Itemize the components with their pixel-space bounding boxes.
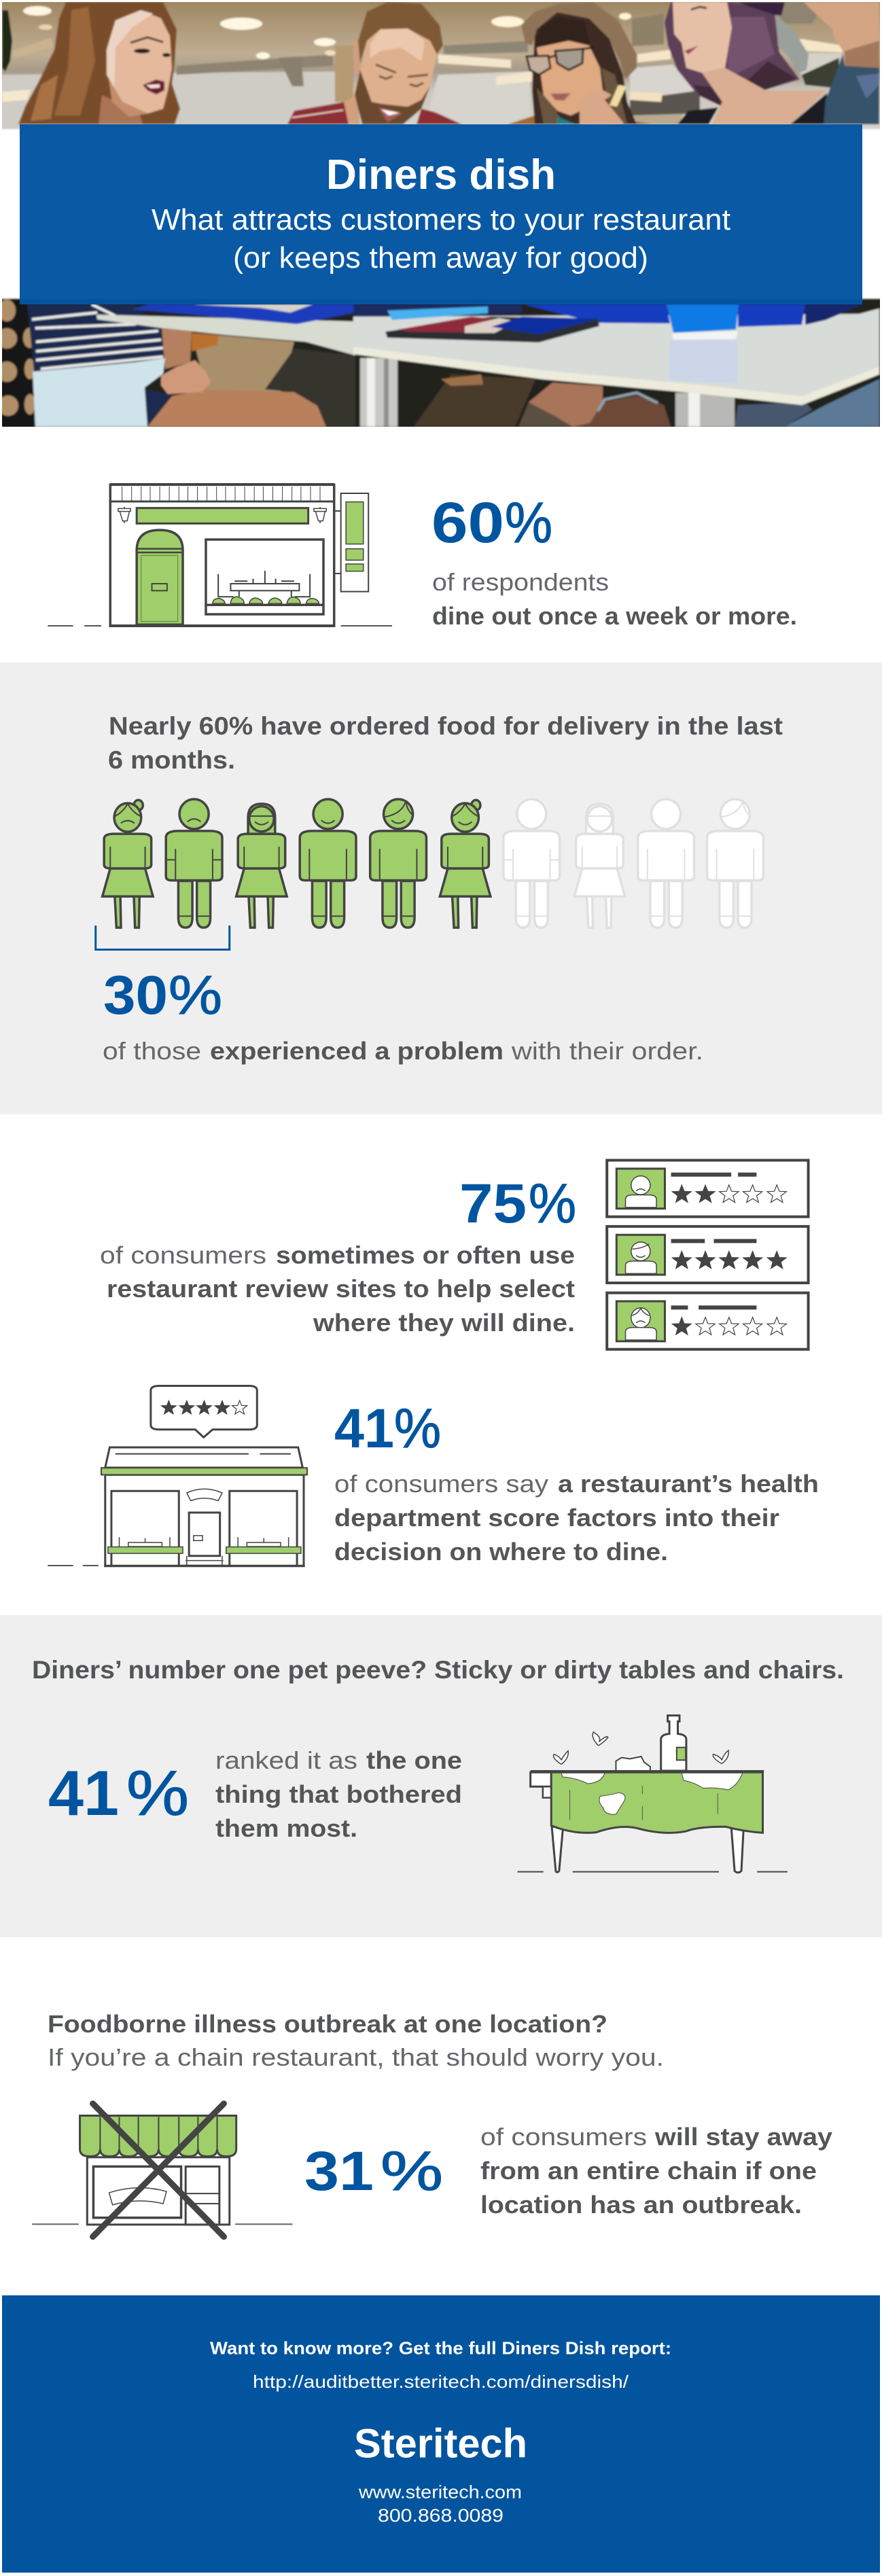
footer website: www.steritech.com (358, 2482, 522, 2502)
heading: delivery line 1: Nearly 60% have ordered food for delivery in the last (109, 712, 783, 740)
number: 75%: 75 (459, 1173, 527, 1235)
text: health score line 1: of consumers say (334, 1470, 548, 1498)
text: review sites line 2: restaurant review sites to help select (107, 1275, 575, 1303)
text: ranked line 3: them most. (215, 1814, 357, 1842)
stat: 60% dine out (431, 491, 797, 630)
text: stay away line 1 (480, 2123, 832, 2151)
number: 41%: 41 (334, 1398, 394, 1460)
text: review sites line 3: where they will dine. (313, 1309, 575, 1337)
number: 60%: % (505, 491, 552, 554)
text: health score line 1 (334, 1470, 819, 1498)
icon: restaurant storefront (48, 484, 392, 626)
footer phone: 800.868.0089 (378, 2505, 504, 2526)
text: of those experienced a problem: experienced a problem (210, 1037, 504, 1065)
text: health score line 2: department score factors into their (334, 1504, 779, 1532)
number: 41%: % (126, 1757, 189, 1829)
text: of those experienced a problem: with their order. (511, 1037, 703, 1065)
hero photo of diners at a table (0, 0, 882, 428)
icons: ten people, six highlighted (96, 799, 763, 950)
number: 30% (103, 965, 222, 1026)
title banner (20, 124, 862, 304)
text: stay away line 1: will stay away (654, 2123, 832, 2151)
number: 60% (431, 491, 552, 554)
icon: building with star rating bubble (48, 1386, 307, 1566)
text: review sites line 1: sometimes or often use (276, 1241, 575, 1269)
subtitle line 1: What attracts customers to your restaurant (152, 203, 730, 236)
subtitle line 2: (or keeps them away for good) (233, 241, 648, 275)
text: dine out once a week or more: dine out once a week or more. (432, 602, 797, 630)
text: stay away line 2: from an entire chain if one (480, 2157, 817, 2185)
number: 60%: 60 (431, 491, 504, 554)
heading: delivery line 2: 6 months. (108, 746, 235, 774)
number: 41% (48, 1757, 189, 1829)
text: stay away line 1: of consumers (480, 2123, 647, 2151)
text: of those experienced a problem (103, 1037, 703, 1065)
number: 30%: 30 (103, 965, 168, 1026)
number: 31%: % (381, 2140, 443, 2202)
number: 41%: % (394, 1398, 441, 1460)
bracket (96, 925, 230, 950)
text: ranked line 1: the one (366, 1746, 462, 1774)
panel: pet peeve (0, 1615, 882, 1937)
heading: pet peeve: Diners’ number one pet peeve? Sticky or dirty tables and chairs. (32, 1656, 844, 1684)
icon: dirty table (518, 1716, 788, 1873)
text: review sites line 1 (100, 1241, 575, 1269)
number: 41%: 41 (48, 1757, 119, 1829)
number: 30%: % (169, 965, 222, 1026)
title: Diners dish: Diners dish (326, 152, 556, 198)
subheading: chain restaurant: If you’re a chain restaurant, that should worry you. (48, 2043, 664, 2071)
text: ranked line 2: thing that bothered (215, 1780, 462, 1808)
text: health score line 3: decision on where to dine. (334, 1538, 668, 1566)
footer call to action: Want to know more? Get the full Diners Dish report: (210, 2337, 671, 2358)
text: of respondents: of respondents (432, 568, 609, 596)
icon: crossed-out storefront (32, 2104, 292, 2237)
number: 31%: 31 (304, 2140, 374, 2202)
text: review sites line 1: of consumers (100, 1241, 266, 1269)
number: 31% (304, 2140, 443, 2202)
text: ranked line 1: ranked it as (215, 1746, 357, 1774)
number: 75% (459, 1173, 576, 1235)
footer link: http://auditbetter.steritech.com/dinersdish/ (253, 2371, 629, 2392)
logo: Steritech: Steritech (354, 2420, 527, 2467)
text: ranked line 1 (215, 1746, 462, 1774)
text: of those experienced a problem: of those (103, 1037, 201, 1065)
panel: delivery (0, 663, 882, 1114)
text: health score line 1: a restaurant’s health (558, 1470, 819, 1498)
text: stay away line 3: location has an outbreak. (480, 2191, 802, 2219)
number: 41% (334, 1398, 441, 1460)
stat: 75% review sites (100, 1161, 809, 1349)
stat: 41% health score (48, 1386, 819, 1566)
icons: review cards (607, 1161, 809, 1349)
number: 75%: % (529, 1173, 576, 1235)
heading: foodborne illness: Foodborne illness outbreak at one location? (48, 2010, 607, 2038)
footer (2, 2295, 880, 2573)
